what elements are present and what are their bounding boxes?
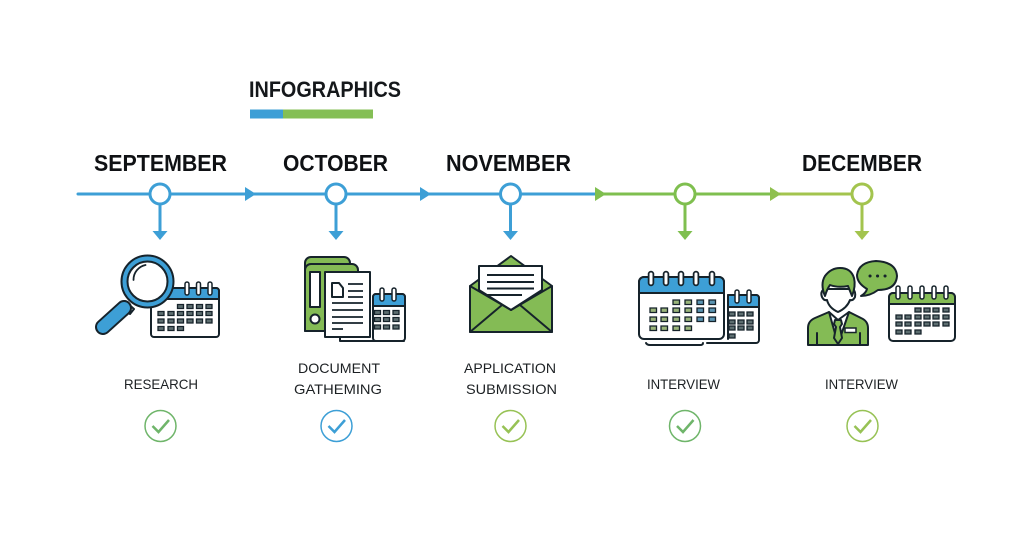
icon: two calendars xyxy=(639,274,759,345)
arrow: timeline 1 xyxy=(245,187,256,201)
timeline xyxy=(78,187,862,201)
arrow: timeline 4 xyxy=(770,187,781,201)
check: document gathering xyxy=(321,410,352,442)
title colour bar xyxy=(250,110,373,118)
node: september xyxy=(150,184,170,240)
check: application submission xyxy=(495,410,526,442)
icon: envelope xyxy=(470,256,552,332)
check: interview 2 xyxy=(847,410,878,442)
step labels: SUBMISSION xyxy=(466,381,557,397)
step labels: RESEARCH xyxy=(124,376,198,392)
month labels xyxy=(94,150,922,176)
node: interview 1 xyxy=(675,184,695,240)
step labels: APPLICATION xyxy=(464,360,556,376)
icon: magnifier and calendar xyxy=(103,256,219,337)
check: research xyxy=(145,410,176,442)
check: interview 1 xyxy=(670,410,700,442)
arrow: timeline 3 xyxy=(595,187,606,201)
node: november xyxy=(500,184,520,240)
step labels: GATHEMING xyxy=(294,381,382,397)
step labels: INTERVIEW xyxy=(647,376,721,392)
step labels: DOCUMENT xyxy=(298,360,380,376)
month labels: OCTOBER xyxy=(283,150,388,176)
icon: person with speech bubble and calendar xyxy=(808,261,955,345)
node: december xyxy=(852,184,872,240)
month labels: SEPTEMBER xyxy=(94,150,227,176)
arrow: timeline 2 xyxy=(420,187,431,201)
step labels: INTERVIEW xyxy=(825,376,899,392)
step labels xyxy=(124,360,899,397)
title: INFOGRAPHICS xyxy=(249,77,401,102)
node: october xyxy=(326,184,346,240)
month labels: DECEMBER xyxy=(802,150,922,176)
icon: documents and calendar xyxy=(305,257,405,341)
month labels: NOVEMBER xyxy=(446,150,571,176)
